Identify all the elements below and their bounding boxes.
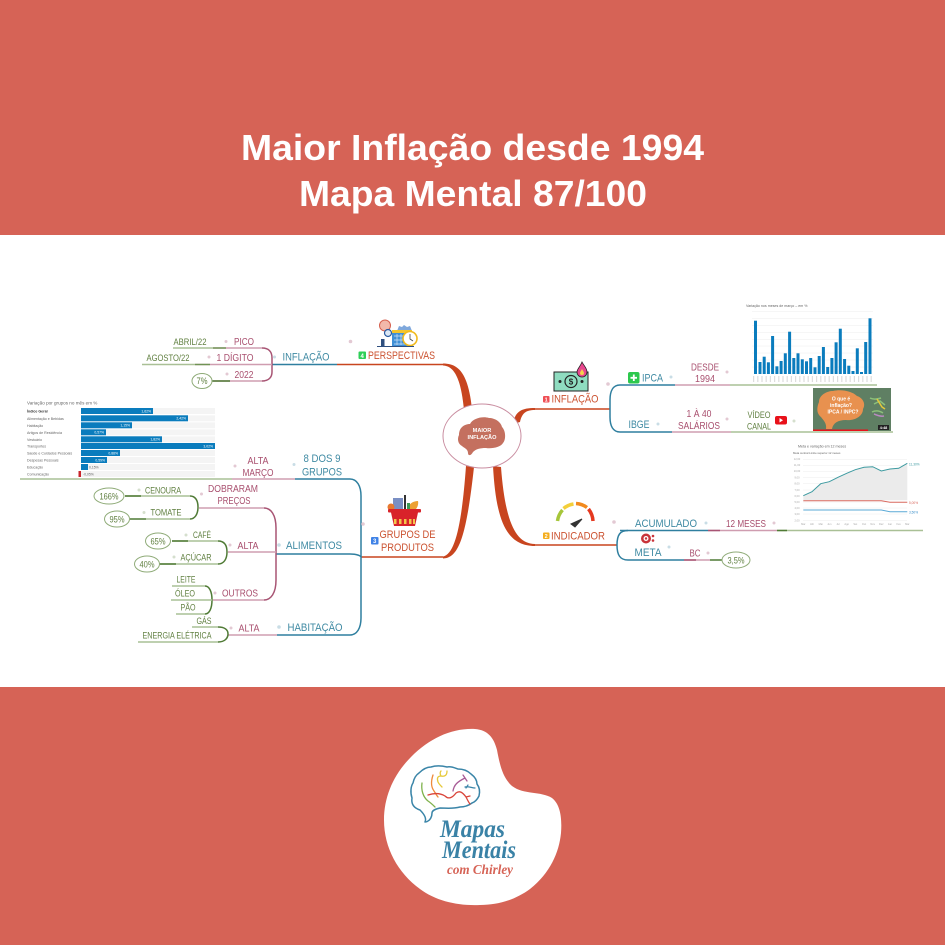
chart axis labels: 12,00 (794, 457, 801, 461)
chart axis labels: Ago (844, 522, 850, 526)
label: 1 à 40 salários: SALÁRIOS (678, 419, 720, 432)
node: 166% (94, 488, 124, 504)
chart category labels: Comunicação (27, 472, 49, 476)
label: 1 à 40 salários: 1 À 40 (686, 407, 712, 420)
label: 8 dos 9 grupos: GRUPOS (302, 466, 342, 478)
label: tomate: TOMATE (150, 508, 182, 518)
label: abril/22: ABRIL/22 (174, 337, 207, 347)
chart axis labels: 7,00 (794, 488, 800, 492)
chart axis labels: Nov (870, 522, 876, 526)
title (241, 127, 704, 214)
chart category labels: Artigos de Residência (27, 431, 62, 435)
12 months line (803, 463, 907, 496)
icon: gauge (558, 504, 593, 527)
logo text: com Chirley (447, 863, 514, 878)
chart category labels: Educação (27, 466, 43, 470)
label: café: CAFÉ (193, 530, 211, 540)
chart axis labels (794, 457, 910, 526)
bar chart: variação nos meses de março: Variação nos meses de março – em % (746, 304, 808, 308)
node: 166%: 166% (100, 492, 119, 502)
heading: grupos de produtos (371, 529, 436, 554)
chart axis labels: Jul (836, 522, 840, 526)
chart axis labels: Dez (879, 522, 884, 526)
label: gás: GÁS (196, 616, 212, 626)
chart axis labels: Out (862, 522, 866, 526)
central label: MAIOR (473, 428, 491, 434)
chart axis labels: 8,00 (794, 482, 800, 486)
branch: perspectivas (142, 320, 443, 388)
chart values: 3,02% (203, 444, 213, 448)
icon: shopping basket (388, 495, 421, 526)
brain illustration (458, 417, 505, 455)
label: bc: BC (690, 548, 700, 560)
line chart: meta e variação em 12 meses: Meta central Limite superior 12 meses (793, 451, 841, 455)
video thumbnail: inflação? (830, 403, 852, 409)
icon: calendar and target (377, 320, 417, 347)
node: 65%: 65% (150, 536, 166, 546)
label: desde 1994 (691, 362, 719, 385)
logo blob (384, 729, 561, 905)
node: 40%: 40% (140, 560, 155, 570)
logo brain (411, 766, 480, 822)
top title band (0, 0, 945, 235)
branch lines (535, 385, 893, 432)
heading: grupos de produtos: PRODUTOS (381, 542, 434, 554)
chart axis labels: Jun (827, 522, 832, 526)
label: alta habitação: ALTA (238, 624, 260, 634)
bar chart: variação nos meses de março (746, 304, 873, 379)
chart category labels (27, 408, 72, 476)
heading: inflação: 1 (545, 398, 548, 404)
label: 2022: 2022 (234, 370, 254, 381)
chart axis labels: 11,00 (794, 463, 801, 467)
label: alimentos: ALIMENTOS (286, 540, 342, 552)
label: dobraram preços: PREÇOS (218, 496, 251, 507)
title: Maior Inflação desde 1994 (241, 127, 704, 168)
chart axis labels: Abr (810, 522, 814, 526)
chart axis labels: Set (853, 522, 858, 526)
logo text: Mapas (439, 816, 505, 843)
chart tracks (81, 408, 215, 477)
node: 95%: 95% (110, 514, 125, 524)
label: alta alimentos: ALTA (238, 541, 259, 552)
bar chart: variação por grupos: Variação por grupos no mês em % (27, 400, 97, 406)
video thumbnail: O que é (832, 396, 850, 402)
label: desde 1994: DESDE (691, 362, 719, 374)
branch: inflação (535, 304, 893, 432)
chart axis labels: 3,00 (794, 512, 800, 516)
heading: grupos de produtos: 3 (373, 539, 377, 545)
label: vídeo canal with youtube icon (747, 410, 787, 432)
branch lines (535, 530, 923, 560)
chart values (83, 409, 213, 476)
node: 3,5%: 3,5% (728, 555, 745, 565)
branch lines (20, 479, 443, 642)
logo text: Mentais (441, 837, 516, 864)
chart bars (754, 318, 872, 374)
chart axis labels: 5,00 (794, 500, 800, 504)
upper limit line (803, 501, 907, 502)
label: pico: PICO (234, 337, 254, 348)
node: 65% (146, 533, 170, 549)
chart values: 0,15% (89, 465, 99, 469)
label: ibge: IBGE (628, 419, 650, 431)
bar chart: variação por grupos (27, 400, 215, 477)
label: 8 dos 9 grupos (302, 453, 342, 478)
node: 3,5% (722, 552, 750, 568)
video thumbnail: 4:48 (880, 426, 887, 430)
label: 12 meses: 12 MESES (726, 519, 766, 530)
chart values: 0,88% (108, 451, 118, 455)
chart axis labels: 2,00 (794, 519, 800, 523)
label: óleo: ÓLEO (175, 588, 195, 598)
heading: indicador: 2 (545, 534, 548, 540)
label: leite: LEITE (176, 574, 196, 584)
label: açúcar: AÇÚCAR (180, 552, 212, 562)
label: ipca with plus icon (628, 372, 664, 384)
connector dots (138, 340, 796, 630)
heading: grupos de produtos: GRUPOS DE (380, 529, 436, 541)
chart axis labels: Mar (801, 522, 806, 526)
heading: inflação: INFLAÇÃO (552, 392, 598, 406)
node: 7% (192, 374, 212, 388)
chart values: 2,42% (176, 417, 186, 421)
chart category labels: Vestuário (27, 438, 42, 442)
chart axis labels: Mar (905, 522, 910, 526)
video thumbnail: IPCA / INPC? (828, 410, 858, 416)
label: alta março: MARÇO (242, 468, 274, 479)
label: acumulado: ACUMULADO (635, 518, 697, 530)
thick orange main branches (443, 364, 535, 558)
chart category labels: Despesas Pessoais (27, 458, 59, 462)
title: Mapa Mental 87/100 (299, 173, 647, 214)
label: inflação: INFLAÇÃO (282, 350, 330, 364)
chart values: 1,15% (120, 424, 130, 428)
central label (468, 428, 497, 441)
line chart: meta e variação em 12 meses (793, 444, 920, 526)
chart category labels: Alimentação e Bebidas (27, 417, 64, 421)
chart category labels: Saúde e Cuidados Pessoais (27, 452, 72, 456)
node: 95% (104, 511, 130, 527)
line chart: meta e variação em 12 meses: 3,50% (909, 510, 918, 514)
heading: indicador: INDICADOR (551, 530, 605, 542)
label: pão: PÃO (180, 602, 196, 612)
chart bars (81, 408, 215, 470)
label: habitação: HABITAÇÃO (288, 621, 342, 634)
chart category labels: Índice Geral (27, 408, 48, 414)
central topic (443, 364, 535, 558)
chart category labels: Transportes (27, 444, 46, 448)
label: desde 1994: 1994 (695, 374, 715, 385)
label: dobraram preços (208, 484, 258, 507)
line chart: meta e variação em 12 meses: 11,30% (909, 462, 920, 466)
label: alta março: ALTA (248, 456, 269, 467)
central target line (803, 510, 907, 512)
chart values: 0,57% (94, 431, 104, 435)
label: dobraram preços: DOBRARAM (208, 484, 258, 495)
label: meta: META (634, 547, 662, 559)
label: energia elétrica: ENERGIA ELÉTRICA (142, 630, 212, 640)
label: cenoura: CENOURA (145, 486, 181, 496)
line chart: meta e variação em 12 meses: Meta e variação em 12 meses (798, 444, 846, 448)
line chart: meta e variação em 12 meses: 5,00% (909, 501, 918, 505)
chart category labels: Habitação (27, 424, 43, 428)
chart axis labels: 4,00 (794, 506, 800, 510)
bottom band with logo (0, 687, 945, 945)
video thumbnail (813, 388, 891, 431)
label: agosto/22: AGOSTO/22 (146, 353, 190, 363)
label: outros: OUTROS (222, 588, 258, 600)
icon: burning banknote (554, 362, 588, 391)
chart values: -0,05% (83, 472, 94, 476)
label: vídeo canal with youtube icon: VÍDEO (748, 410, 771, 420)
chart axis labels: 10,00 (794, 469, 801, 473)
node: 7%: 7% (196, 376, 208, 386)
chart axis labels: 9,00 (794, 475, 800, 479)
branch lines (142, 348, 443, 381)
label: ipca with plus icon: IPCA (642, 372, 664, 384)
heading: perspectivas: PERSPECTIVAS (368, 350, 435, 362)
branch: grupos de produtos (20, 453, 443, 642)
node: 40% (134, 556, 160, 572)
label: 8 dos 9 grupos: 8 DOS 9 (304, 453, 340, 465)
chart values: 1,62% (141, 409, 151, 413)
central label: INFLAÇÃO (468, 434, 497, 441)
label: 1 dígito: 1 DÍGITO (216, 351, 254, 364)
icon: burning banknote: $ (569, 378, 574, 386)
chart axis labels: 6,00 (794, 494, 800, 498)
label: 1 à 40 salários (678, 407, 720, 432)
icon: target (641, 534, 654, 544)
chart values: 0,59% (95, 458, 105, 462)
logo text (439, 816, 516, 878)
chart axis labels: Jan (888, 522, 893, 526)
chart area (803, 463, 907, 500)
chart axis labels: Fev (897, 522, 902, 526)
heading: perspectivas: 4 (361, 354, 365, 360)
chart axis labels: Mai (819, 522, 823, 526)
label: vídeo canal with youtube icon: CANAL (747, 422, 771, 432)
label: alta março (242, 456, 274, 479)
branch: indicador (535, 444, 923, 568)
chart values: 1,82% (150, 438, 160, 442)
